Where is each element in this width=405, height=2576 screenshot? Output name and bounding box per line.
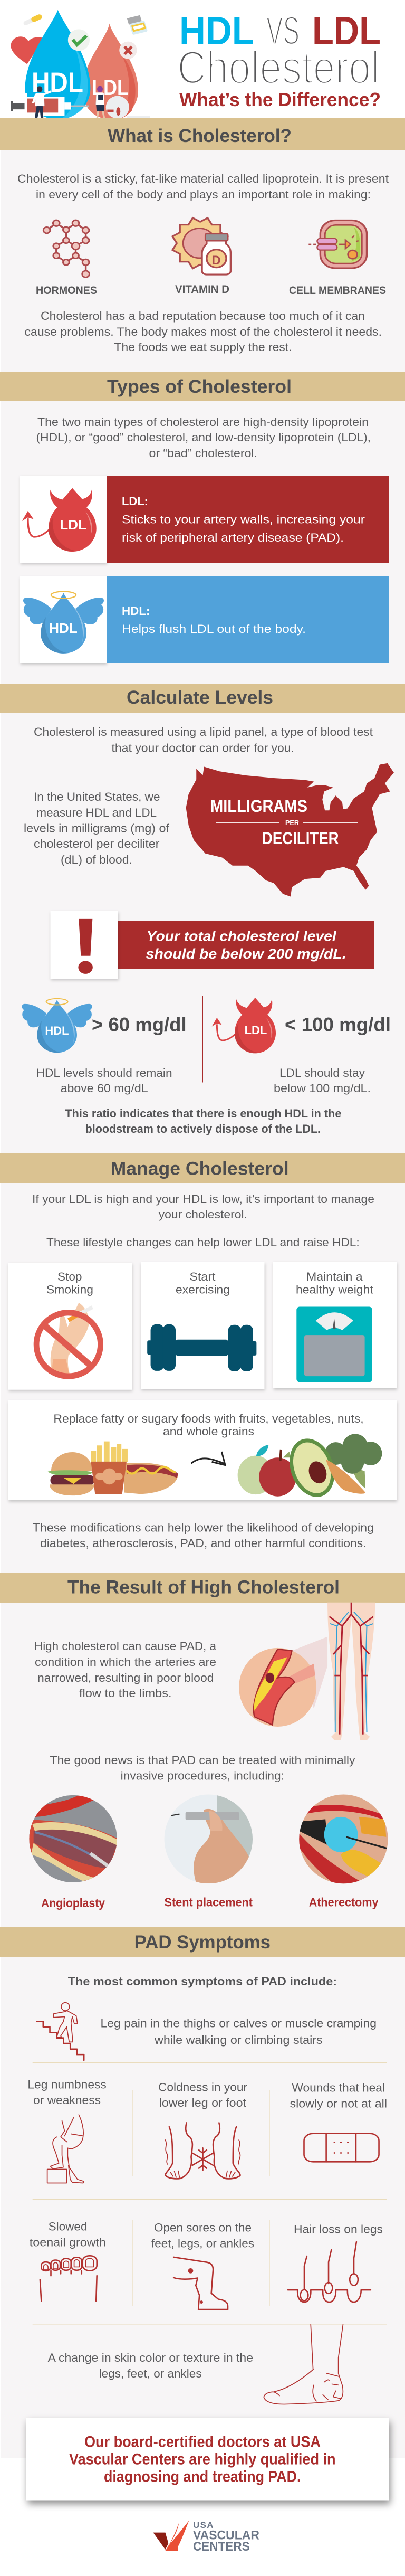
card: stop smoking: Smoking [46, 1283, 93, 1296]
card: healthy weight: healthy weight [296, 1283, 373, 1296]
logo: USA Vascular Centers: VASCULAR [193, 2528, 259, 2542]
symptom: coldness [158, 2080, 247, 2179]
text: good news [50, 1754, 355, 1782]
stat: LDL target: < 100 mg/dl [285, 1014, 391, 1036]
icon: small angel drop: HDL [45, 1024, 69, 1037]
icon: small angel drop [22, 999, 92, 1053]
text: PAD explanation: condition in which the arteries are [35, 1655, 216, 1669]
icon: heart [11, 36, 43, 64]
symptom: slow healing wounds [290, 2081, 387, 2162]
icon: person on stairs [37, 2003, 84, 2060]
card: stop smoking: Stop [57, 1270, 82, 1283]
card: stop smoking [8, 1263, 132, 1390]
icon: small devil drop [212, 998, 276, 1053]
symptom: open sores: Open sores on the [154, 2221, 252, 2234]
text: modifications benefits: diabetes, atherosclerosis, PAD, and other harmful conditions. [40, 1537, 366, 1550]
text: HDL description: Helps flush LDL out of the body. [122, 622, 306, 636]
text: LDL description: LDL: [122, 495, 148, 508]
card: replace foods [8, 1400, 397, 1504]
symptom: hair loss: Hair loss on legs [294, 2222, 383, 2236]
callout: board-certified doctors: Vascular Centers are highly qualified in [69, 2450, 336, 2468]
stat: HDL target: above 60 mg/dL [61, 1082, 148, 1095]
symptom: slowed toenail growth [30, 2220, 106, 2301]
logo: USA Vascular Centers [153, 2520, 259, 2554]
heading: calculate levels: Calculate Levels [127, 687, 273, 708]
callout: board-certified doctors [26, 2418, 389, 2500]
icon: cell membrane [308, 220, 367, 268]
text: manage intro: These lifestyle changes can help lower LDL and raise HDL: [46, 1236, 360, 1249]
labels: uses of cholesterol: HORMONES [36, 285, 97, 297]
card: healthy weight [273, 1262, 397, 1388]
text: total cholesterol: Your total cholesterol level [147, 929, 336, 944]
text: PAD explanation: High cholesterol can cause PAD, a [34, 1640, 217, 1653]
card: start exercising: exercising [176, 1283, 230, 1296]
text: bad reputation: Cholesterol has a bad reputation because too much of it can [41, 309, 365, 323]
heading: manage cholesterol: Manage Cholesterol [111, 1158, 289, 1179]
icon: leg on a box [47, 2115, 84, 2183]
symptom: skin changes: A change in skin color or texture in the [48, 2351, 253, 2364]
section: the result of high cholesterol [0, 1573, 405, 1910]
text: PAD explanation: flow to the limbs. [79, 1687, 172, 1700]
symptom: numbness: Leg numbness [27, 2078, 107, 2091]
stat: HDL target: HDL levels should remain [36, 1066, 172, 1079]
icon: foot [264, 2325, 343, 2404]
text: symptoms intro: The most common symptoms of PAD include: [68, 1975, 337, 1988]
symptom: coldness: Coldness in your [158, 2080, 247, 2094]
text: definition [17, 172, 389, 201]
symptom: open sores: feet, legs, or ankles [151, 2237, 254, 2250]
text: good news: invasive procedures, including: [121, 1769, 284, 1782]
procedure: angioplasty [26, 1793, 121, 1910]
icon: dumbbell [147, 1324, 256, 1371]
card: replace foods: and whole grains [163, 1425, 254, 1438]
icon: no smoking hand [36, 1303, 101, 1376]
icon: bathroom scale [296, 1307, 372, 1382]
map: United States with milligrams per deciliter: DECILITER [262, 829, 339, 848]
card: start exercising: Start [190, 1270, 215, 1283]
icon: D letter: D [211, 253, 221, 268]
text: lipid panel: Cholesterol is measured using a lipid panel, a type of blood test [34, 725, 373, 738]
text: measurement in the US [24, 790, 170, 866]
heading: what is cholesterol: What is Cholesterol? [108, 126, 292, 146]
text: bad reputation [24, 309, 382, 354]
icon: toes [40, 2256, 97, 2301]
title: HDL [179, 8, 254, 53]
text: ratio note [65, 1107, 341, 1135]
text: lipid panel: that your doctor can order for you. [112, 741, 294, 755]
section: PAD symptoms [0, 1927, 405, 2404]
text: ratio note: This ratio indicates that there is enough HDL in the [65, 1107, 341, 1120]
icon: vitamin D sun and bottle [171, 217, 230, 274]
icon: devil LDL drop: LDL [60, 517, 86, 533]
icon: check badge [68, 29, 90, 51]
drop labels [32, 67, 129, 100]
text: PAD explanation [34, 1640, 217, 1700]
symptom: slow healing wounds: Wounds that heal [292, 2081, 385, 2095]
heading: manage cholesterol [0, 1153, 405, 1183]
title [177, 8, 381, 110]
heading: the result of high cholesterol: The Result of High Cholesterol [68, 1577, 340, 1598]
symptom: slow healing wounds: slowly or not at all [290, 2097, 387, 2110]
text: modifications benefits [33, 1521, 374, 1550]
callout: board-certified doctors: Our board-certified doctors at USA [84, 2433, 321, 2450]
text: HDL description [122, 604, 306, 636]
icon: female doctor [96, 86, 104, 119]
title: Cholesterol [177, 41, 380, 93]
text: lipid panel [34, 725, 373, 755]
text: PAD explanation: narrowed, resulting in poor blood [37, 1671, 214, 1684]
map: United States with milligrams per deciliter: MILLIGRAMS [210, 797, 307, 816]
icon: hair follicles [288, 2242, 371, 2302]
icon: male doctor [33, 86, 51, 119]
text: LDL description: risk of peripheral artery disease (PAD). [122, 531, 344, 544]
icon: HDL drop [25, 10, 90, 119]
text: total cholesterol: should be below 200 mg/dL. [146, 946, 346, 962]
icon: hormones molecule [43, 220, 89, 277]
icon: bent leg with sores [173, 2257, 228, 2309]
map: United States with milligrams per deciliter [186, 763, 394, 896]
icon: healthy food [238, 1432, 382, 1504]
text: measurement in the US: In the United States, we [34, 790, 160, 803]
text: measurement in the US: (dL) of blood. [61, 853, 132, 866]
text: bad reputation: cause problems. The body makes most of the cholesterol it needs. [24, 325, 382, 338]
labels: uses of cholesterol: VITAMIN D [175, 283, 229, 296]
drop labels: LDL [92, 75, 129, 100]
text: two main types: or “bad” cholesterol. [149, 447, 257, 460]
icon: devil LDL drop [22, 488, 97, 552]
heading: what is cholesterol [0, 118, 405, 150]
text: HDL description: HDL: [122, 604, 150, 618]
card: start exercising [141, 1262, 265, 1389]
callout: board-certified doctors: diagnosing and treating PAD. [104, 2468, 301, 2485]
symptom: leg pain: while walking or climbing stairs [154, 2033, 323, 2047]
header illustration: HDL and LDL drops [11, 10, 150, 119]
title: LDL [312, 8, 381, 53]
heading: calculate levels [0, 684, 405, 713]
stat: LDL target: below 100 mg/dL. [274, 1082, 371, 1095]
icon: pill roll [106, 96, 150, 119]
labels: uses of cholesterol: CELL MEMBRANES [289, 285, 386, 297]
procedure: angioplasty: Angioplasty [41, 1896, 105, 1910]
symptom: skin changes: legs, feet, or ankles [99, 2367, 201, 2380]
card: healthy weight: Maintain a [306, 1270, 363, 1283]
stat: HDL target [22, 999, 187, 1095]
map: United States with milligrams per deciliter: PER [285, 819, 300, 827]
icon: pill bottle [127, 14, 148, 35]
card: LDL [20, 476, 389, 563]
text: definition: Cholesterol is a sticky, fat-like material called lipoprotein. It is present [17, 172, 389, 185]
icon: LDL drop [83, 24, 138, 119]
stat: LDL target: LDL should stay [279, 1066, 365, 1079]
text: total cholesterol [146, 929, 346, 962]
symptom: skin changes [48, 2325, 343, 2404]
text: manage intro: If your LDL is high and your HDL is low, it’s important to manage [32, 1192, 374, 1206]
logo: USA Vascular Centers: USA [193, 2520, 213, 2530]
symptom: slowed toenail growth: Slowed [49, 2220, 88, 2233]
symptom: leg pain: Leg pain in the thighs or calves or muscle cramping [100, 2016, 377, 2030]
icon: capsule [26, 17, 39, 23]
symptom: coldness: lower leg or foot [159, 2096, 246, 2109]
callout: total cholesterol limit [51, 911, 374, 979]
icon: angel HDL drop [23, 592, 104, 654]
title: VS [266, 8, 300, 53]
text: LDL description [122, 495, 365, 544]
symptom: numbness: or weakness [33, 2094, 101, 2107]
card: replace foods: Replace fatty or sugary foods with fruits, vegetables, nuts, [53, 1412, 364, 1425]
procedure: stent placement: Stent placement [165, 1896, 253, 1909]
text: manage intro [32, 1192, 374, 1249]
text: two main types: The two main types of cholesterol are high-density lipoprotein [37, 415, 369, 429]
procedure: atherectomy: Atherectomy [309, 1896, 379, 1909]
stat: LDL target [212, 998, 391, 1095]
heading: the result of high cholesterol [0, 1573, 405, 1603]
icon: cold feet with snowflake [165, 2123, 240, 2179]
title: What’s the Difference? [179, 89, 381, 110]
text: manage intro: your cholesterol. [159, 1208, 247, 1221]
text: two main types: (HDL), or “good” cholesterol, and low-density lipoprotein (LDL), [36, 431, 371, 444]
text: measurement in the US: cholesterol per deciliter [34, 837, 159, 850]
icon: logo mark [153, 2521, 189, 2551]
heading: types of cholesterol [0, 372, 405, 401]
labels: uses of cholesterol [36, 283, 386, 297]
text: measurement in the US: measure HDL and LDL [37, 806, 157, 819]
heading: PAD symptoms: PAD Symptoms [134, 1932, 271, 1953]
heading: PAD symptoms [0, 1927, 405, 1957]
section: types of cholesterol [0, 372, 405, 663]
text: LDL description: Sticks to your artery walls, increasing your [122, 513, 365, 526]
text: modifications benefits: These modifications can help lower the likelihood of developing [33, 1521, 374, 1534]
symptom: numbness [27, 2078, 107, 2183]
card: HDL [20, 576, 389, 663]
symptom: hair loss [288, 2222, 383, 2302]
arrow: swap foods [191, 1452, 225, 1465]
symptom: leg pain [37, 2003, 377, 2060]
text: ratio note: bloodstream to actively dispose of the LDL. [85, 1122, 321, 1135]
heading: types of cholesterol: Types of Cholesterol [107, 376, 292, 397]
text: measurement in the US: levels in milligrams (mg) of [24, 821, 170, 835]
procedure: atherectomy [297, 1793, 390, 1909]
icon: small devil drop: LDL [245, 1024, 267, 1037]
text: bad reputation: The foods we eat supply the rest. [114, 340, 292, 354]
text: two main types [36, 415, 371, 460]
icon: angel HDL drop: HDL [49, 620, 78, 636]
text: good news: The good news is that PAD can be treated with minimally [50, 1754, 355, 1767]
icon: bandage [304, 2134, 379, 2162]
section: what is cholesterol [0, 118, 405, 354]
symptom: open sores [151, 2221, 254, 2309]
section: manage cholesterol [0, 1153, 405, 1550]
drop labels: HDL [32, 67, 83, 98]
illustration: leg arteries [239, 1603, 375, 1740]
stat: HDL target: > 60 mg/dl [92, 1014, 187, 1036]
icon: cross badge [119, 42, 137, 59]
icon: fast food [48, 1442, 178, 1495]
section: calculate levels [0, 684, 405, 1135]
text: definition: in every cell of the body and plays an important role in making: [36, 188, 371, 201]
icon: syringe [11, 93, 89, 119]
symptom: slowed toenail growth: toenail growth [30, 2236, 106, 2249]
icon: exclamation mark [78, 919, 93, 974]
procedure: stent placement [163, 1793, 256, 1909]
logo: USA Vascular Centers: CENTERS [193, 2540, 250, 2554]
